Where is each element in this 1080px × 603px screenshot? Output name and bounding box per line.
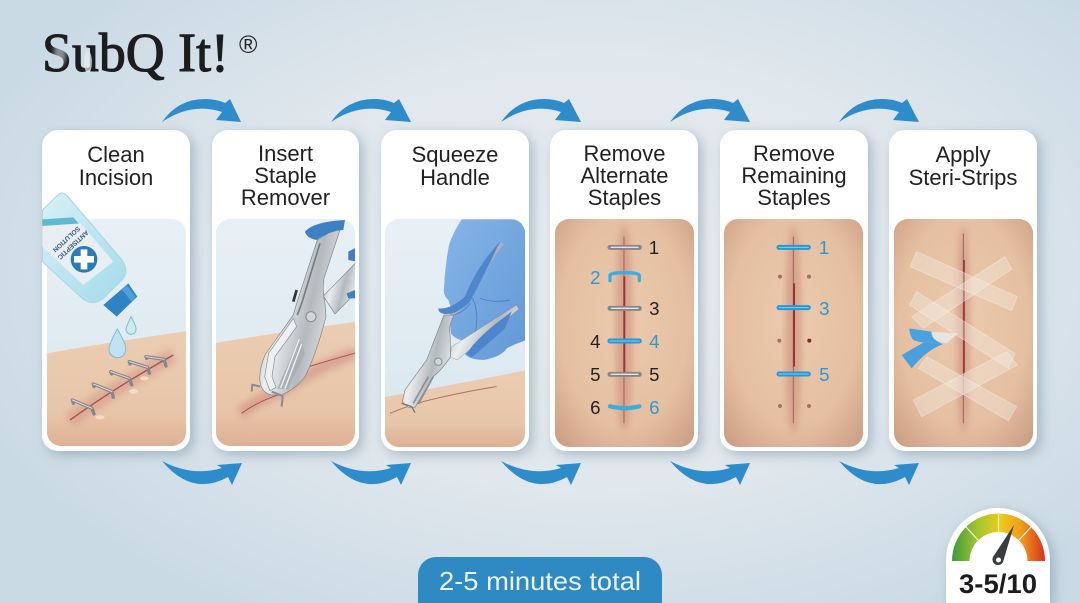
staple numbers: 5 — [819, 364, 830, 385]
heading: apply steri-strips: Apply — [935, 142, 991, 167]
panel: step 4 remove alternate staples — [550, 130, 698, 451]
icon: antiseptic bottle and drops — [42, 193, 137, 358]
staple numbers: 4 — [649, 331, 660, 352]
icon: antiseptic bottle and drops: SOLUTION — [51, 224, 81, 253]
staple numbers: 1 — [819, 237, 829, 258]
illustration: gloved hand squeezing remover — [383, 219, 527, 448]
heading: insert staple remover: Staple — [254, 163, 317, 188]
strip backing tab — [902, 328, 958, 368]
gauge arc — [952, 514, 1045, 561]
heading: remove remaining staples: Remove — [753, 141, 835, 166]
heading: squeeze handle: Squeeze — [412, 142, 498, 167]
heading: clean incision: Incision — [79, 165, 153, 190]
badge: pain gauge — [946, 508, 1050, 603]
staple numbers: 5 — [649, 364, 660, 385]
heading: clean incision: Clean — [87, 142, 145, 167]
icon: antiseptic bottle and drops: ANTISEPTIC — [56, 228, 90, 261]
illustration: incision with remaining staples — [724, 219, 863, 447]
heading: remove remaining staples: Remaining — [741, 163, 847, 188]
heading: remove alternate staples: Staples — [588, 185, 661, 210]
staple numbers: 3 — [649, 298, 660, 319]
arrows: top row — [162, 99, 919, 122]
badge: total time — [418, 557, 662, 603]
staple numbers: 1 — [649, 237, 659, 258]
heading: remove remaining staples: Staples — [757, 185, 831, 210]
panel: step 2 insert staple remover — [212, 130, 359, 451]
staple numbers: 6 — [590, 397, 601, 418]
illustration: skin with stapled incision — [43, 219, 190, 450]
heading: insert staple remover: Remover — [241, 185, 330, 210]
staple numbers: 5 — [590, 364, 601, 385]
staple numbers — [590, 237, 660, 418]
staple numbers: 3 — [819, 298, 830, 319]
panel: step 5 remove remaining staples — [720, 130, 868, 451]
illustration: remover on staple — [213, 219, 357, 450]
gauge needle — [992, 525, 1014, 565]
heading: remove alternate staples: Remove — [584, 141, 665, 166]
staple numbers: 4 — [590, 331, 601, 352]
panel: step 6 apply steri-strips — [889, 130, 1037, 451]
badge: total time: 2-5 minutes total — [439, 566, 641, 596]
arrows: bottom row — [162, 461, 919, 485]
staple numbers: 6 — [649, 397, 660, 418]
heading: apply steri-strips: Steri-Strips — [909, 165, 1017, 190]
staple numbers: 2 — [590, 267, 601, 288]
title: SubQ It!: ® — [239, 31, 258, 59]
heading: insert staple remover: Insert — [258, 141, 313, 166]
heading: squeeze handle: Handle — [420, 165, 490, 190]
illustration: incision with numbered staples — [555, 219, 694, 447]
heading: remove alternate staples: Alternate — [580, 163, 669, 188]
staple numbers — [820, 241, 829, 381]
pain score: 3-5/10 — [959, 569, 1037, 599]
panel: step 1 clean incision — [42, 130, 190, 451]
title: SubQ It!: SubQ It! — [42, 22, 229, 83]
illustration: strips across incision — [894, 219, 1033, 447]
panel: step 3 squeeze handle — [381, 130, 529, 451]
